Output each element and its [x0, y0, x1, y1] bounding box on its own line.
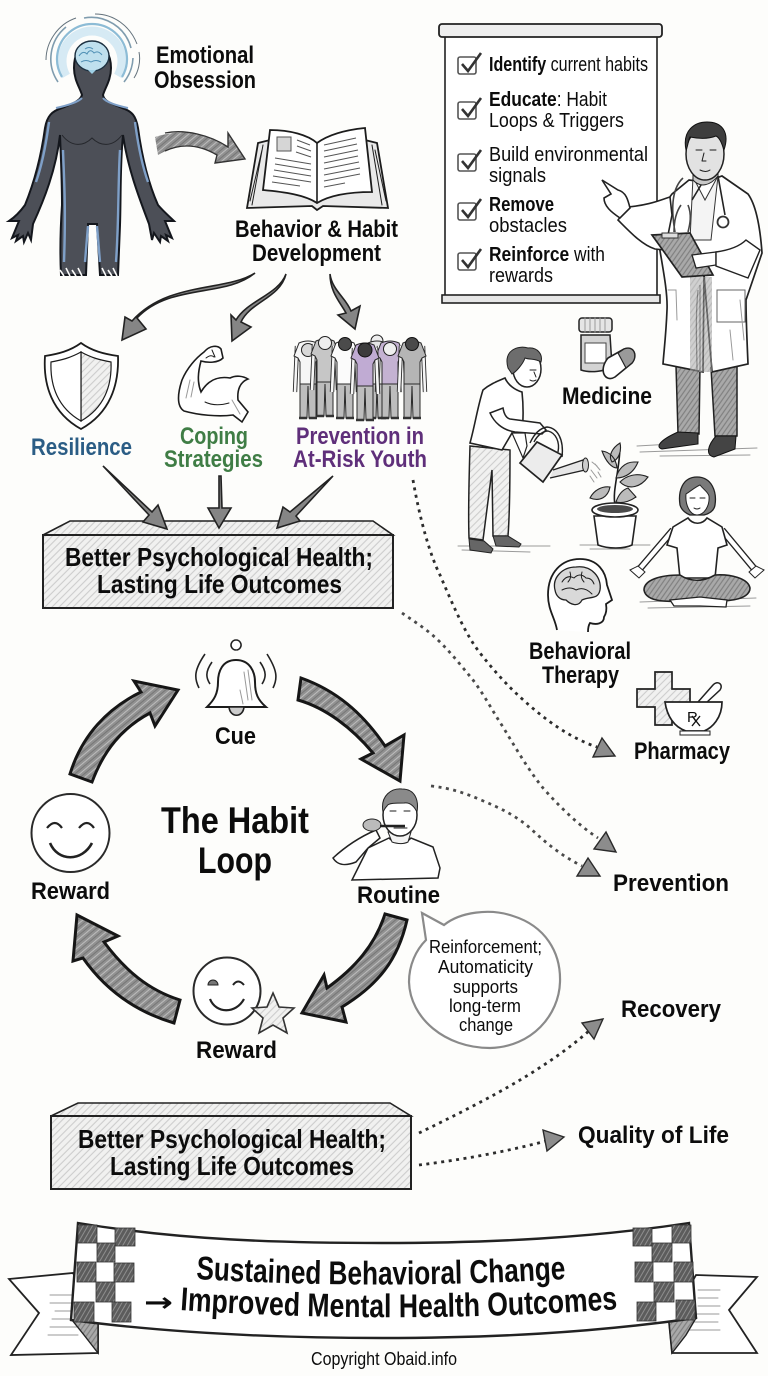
banner left tail: [9, 1273, 98, 1355]
arrow: dotted to quality of life: [419, 1130, 564, 1165]
icon: doctor presenting: [602, 122, 762, 457]
callout: reinforcement bubble: supports: [453, 977, 518, 997]
banner text: Improved Mental Health Outcomes: [182, 1288, 616, 1320]
icon: meditating woman: [630, 477, 764, 608]
label: Reward left: Reward: [31, 878, 110, 905]
checklist item: educate: [458, 89, 624, 132]
panel: checklist board: [439, 24, 662, 303]
banner left checker: [74, 1225, 135, 1322]
icon: potted plant: [580, 443, 650, 549]
checklist item: educate: Educate: Habit: [489, 89, 607, 111]
checklist item: reinforce: rewards: [489, 265, 553, 287]
callout: reinforcement bubble: long-term: [449, 996, 521, 1016]
banner text: →: [144, 1288, 173, 1318]
arrow: dotted to prevention lower: [431, 786, 600, 876]
panel: outcomes box bottom: Lasting Life Outcomes: [110, 1151, 354, 1181]
banner body: [71, 1223, 696, 1338]
checklist item: identify: Identify current habits: [489, 54, 648, 76]
panel: outcomes box top: [43, 521, 393, 608]
label: Coping Strategies: [164, 423, 263, 473]
icon: smiley with star: [194, 958, 294, 1033]
label: Coping Strategies: Coping: [180, 423, 248, 450]
checklist item: remove: obstacles: [489, 215, 567, 237]
icon: head with brain: [548, 559, 612, 632]
label: Prevention in At-Risk Youth: Prevention in: [296, 423, 424, 450]
arrow: dotted to prevention upper: [402, 613, 616, 852]
label: Coping Strategies: Strategies: [164, 446, 263, 473]
heading: Behavior and Habit Development: Behavior & Habit: [235, 216, 398, 243]
checklist item: build: [458, 144, 648, 187]
icon: ringing bell: [196, 640, 276, 715]
label: Pharmacy: Pharmacy: [634, 738, 731, 765]
banner right tail: [669, 1275, 757, 1353]
checklist item: remove: [458, 194, 567, 237]
heading: Emotional Obsession: [154, 42, 256, 94]
icon: smiley left: [32, 794, 110, 872]
arrow: person to book: [155, 132, 245, 163]
panel: outcomes box bottom: Better Psychological Health;: [78, 1124, 386, 1154]
heading: Behavior and Habit Development: [235, 216, 398, 267]
heading: Emotional Obsession: Obsession: [154, 67, 256, 94]
callout: reinforcement bubble: [409, 912, 560, 1048]
icon: man watering plant: [458, 347, 601, 553]
icon: boy brushing teeth: [333, 789, 440, 880]
label: Prevention in At-Risk Youth: [293, 423, 427, 473]
text: copyright: Copyright Obaid.info: [311, 1349, 457, 1369]
checklist item: educate: Loops & Triggers: [489, 110, 624, 132]
icon: pharmacy cross and mortar: [637, 672, 722, 735]
checklist item: reinforce: Reinforce with: [489, 244, 605, 266]
arrow: dotted to recovery: [419, 1019, 603, 1133]
panel: outcomes box top: Lasting Life Outcomes: [97, 569, 342, 599]
label: Prevention in At-Risk Youth: At-Risk Youth: [293, 446, 427, 473]
label: Behavioral Therapy: [529, 638, 631, 689]
banner text: [144, 1256, 616, 1320]
label: Quality of Life: Quality of Life: [578, 1122, 729, 1149]
icon: flexed arm: [178, 346, 248, 422]
icon: shield: [45, 343, 118, 429]
label: Behavioral Therapy: Behavioral: [529, 638, 631, 665]
banner: sustained behavioral change: [7, 1222, 759, 1356]
arrow: reward to cue: [70, 681, 178, 782]
icon: medicine bottle and pill: [579, 318, 635, 379]
icon: group of young people: [294, 335, 426, 420]
callout: reinforcement bubble: change: [459, 1015, 513, 1035]
arrow: reward to reward left: [73, 915, 180, 1023]
arrow: cue to routine: [298, 678, 404, 781]
icon: open book: [247, 128, 388, 210]
arrow: dotted to pharmacy: [413, 480, 615, 757]
title: The Habit Loop: Loop: [198, 840, 272, 881]
arrow: routine to reward: [302, 914, 407, 1022]
label: Prevention: Prevention: [613, 870, 729, 897]
panel: outcomes box top: Better Psychological Health;: [65, 542, 373, 572]
label: Routine: Routine: [357, 882, 440, 909]
banner right checker: [633, 1225, 695, 1321]
title: The Habit Loop: [161, 800, 309, 881]
callout: reinforcement bubble: Automaticity: [438, 957, 533, 977]
label: Behavioral Therapy: Therapy: [542, 662, 620, 689]
checklist item: build: Build environmental: [489, 144, 648, 166]
heading: Behavior and Habit Development: Development: [252, 240, 381, 267]
heading: Emotional Obsession: Emotional: [156, 42, 254, 69]
checklist item: reinforce: [458, 244, 605, 287]
arrow: development to resilience: [122, 273, 255, 340]
callout: reinforcement bubble: Reinforcement;: [429, 937, 542, 957]
icon: human figure with glowing brain: [9, 14, 174, 276]
label: Recovery: Recovery: [621, 996, 722, 1023]
panel: outcomes box bottom: [51, 1103, 411, 1189]
label: Medicine: Medicine: [562, 383, 652, 410]
title: The Habit Loop: The Habit: [161, 800, 309, 841]
arrows: traits into outcomes box: [103, 466, 333, 529]
label: Reward bottom: Reward: [196, 1037, 277, 1064]
checklist item: build: signals: [489, 165, 546, 187]
icon: pharmacy cross and mortar: R: [687, 709, 698, 726]
banner text: Sustained Behavioral Change: [197, 1256, 564, 1288]
arrow: development to coping: [231, 274, 286, 341]
arrow: development to youth: [330, 274, 360, 329]
checklist item: remove: Remove: [489, 194, 554, 216]
label: Cue: Cue: [215, 723, 256, 750]
label: Resilience: Resilience: [31, 434, 132, 461]
